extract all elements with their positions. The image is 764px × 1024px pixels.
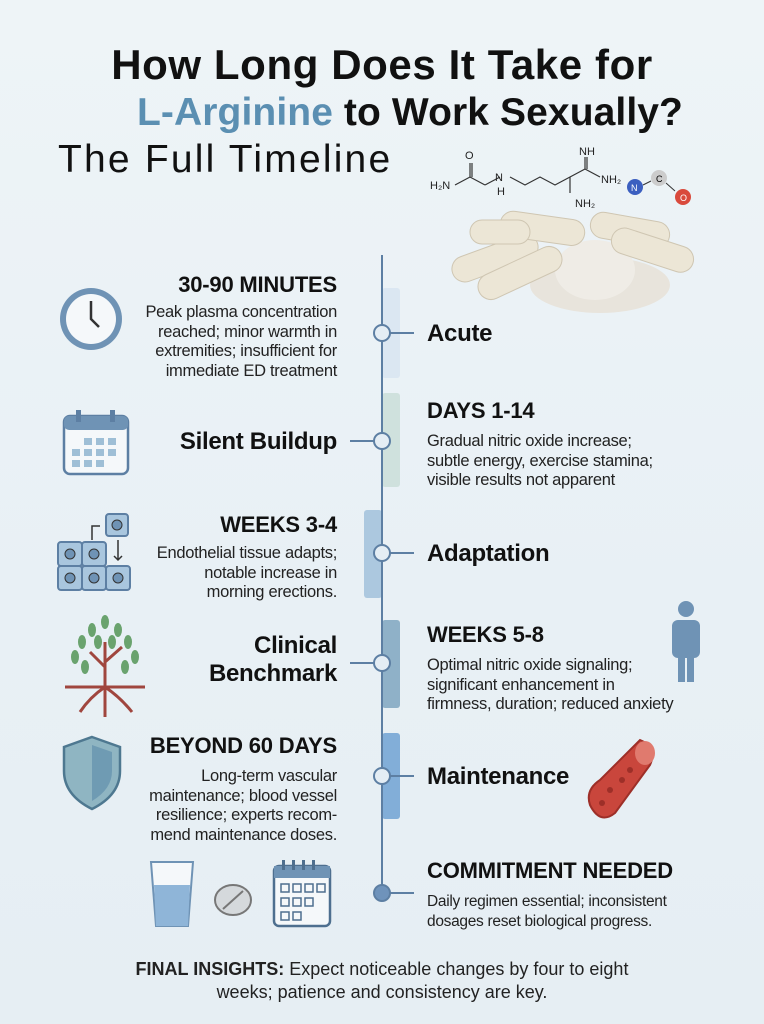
stage 5: beyond 60 days: resilience; experts recom- <box>156 806 337 824</box>
label: maintenance: Maintenance <box>427 763 569 790</box>
title: L-Arginine to Work Sexually? <box>137 91 683 134</box>
final insights: weeks; patience and consistency are key. <box>217 982 547 1002</box>
stage 3: weeks 3-4: notable increase in <box>204 564 337 582</box>
icon: pill <box>214 884 252 916</box>
molecule diagram: H <box>497 186 505 198</box>
stage 5: beyond 60 days <box>149 733 337 844</box>
stage 2: days 1-14: subtle energy, exercise stamina; <box>427 452 653 470</box>
stage 1: 30-90 minutes: extremities; insufficient for <box>155 342 337 360</box>
molecule diagram: NH <box>579 146 595 158</box>
icon: calendar <box>62 410 130 476</box>
icon: tree <box>65 615 145 717</box>
final insights <box>136 959 628 1002</box>
icon: cells <box>57 513 131 591</box>
molecule diagram: C <box>656 174 663 184</box>
stage 1: 30-90 minutes: immediate ED treatment <box>166 362 337 380</box>
stage 1: 30-90 minutes: 30-90 MINUTES <box>178 272 337 297</box>
subtitle: The Full Timeline <box>58 138 392 181</box>
stage 5: beyond 60 days: mend maintenance doses. <box>150 826 337 844</box>
molecule diagram: N <box>495 172 503 184</box>
title: How Long Does It Take for <box>111 41 653 88</box>
molecule diagram <box>430 146 691 210</box>
stage 4: weeks 5-8: firmness, duration; reduced anxiety <box>427 695 673 713</box>
stage 5: beyond 60 days: BEYOND 60 DAYS <box>150 733 337 758</box>
stage 3: weeks 3-4: Endothelial tissue adapts; <box>157 544 337 562</box>
label: clinical benchmark: Benchmark <box>209 660 337 687</box>
molecule diagram: H₂N <box>430 180 450 192</box>
stage 2: days 1-14: Gradual nitric oxide increase; <box>427 432 632 450</box>
molecule diagram: N <box>631 183 638 193</box>
molecule diagram: NH₂ <box>575 198 595 210</box>
stage 5: beyond 60 days: Long-term vascular <box>201 767 337 785</box>
label: clinical benchmark: Clinical <box>254 632 337 659</box>
stage 4: weeks 5-8 <box>427 622 674 713</box>
stage 4: weeks 5-8: significant enhancement in <box>427 676 615 694</box>
icon: blood vessel <box>588 738 655 818</box>
stage 1: 30-90 minutes <box>145 272 338 380</box>
stage 3: weeks 3-4: morning erections. <box>207 583 337 601</box>
stage 6: commitment needed: dosages reset biological progress. <box>427 912 652 930</box>
stage 3: weeks 3-4 <box>157 512 338 601</box>
label: silent buildup: Silent Buildup <box>180 428 337 455</box>
icon: clock <box>60 288 122 350</box>
stage 2: days 1-14: DAYS 1-14 <box>427 398 534 423</box>
stage 3: weeks 3-4: WEEKS 3-4 <box>220 512 337 537</box>
label: acute: Acute <box>427 320 492 347</box>
icon: water glass <box>150 861 194 927</box>
label: clinical benchmark <box>209 632 338 687</box>
stage 1: 30-90 minutes: reached; minor warmth in <box>158 322 337 340</box>
stage 6: commitment needed: Daily regimen essential; inconsistent <box>427 893 667 910</box>
stage 6: commitment needed <box>427 858 673 930</box>
icon: person <box>672 601 700 682</box>
molecule diagram: O <box>680 193 687 203</box>
label: adaptation: Adaptation <box>427 540 549 567</box>
stage 2: days 1-14: visible results not apparent <box>427 471 615 489</box>
icon: calendar check <box>272 860 332 928</box>
stage 4: weeks 5-8: Optimal nitric oxide signaling; <box>427 656 632 674</box>
stage 4: weeks 5-8: WEEKS 5-8 <box>427 622 544 647</box>
stage 6: commitment needed: COMMITMENT NEEDED <box>427 858 673 883</box>
stage 1: 30-90 minutes: Peak plasma concentration <box>145 303 337 321</box>
icon: shield <box>62 736 122 810</box>
capsules and powder image <box>451 210 694 313</box>
final insights: FINAL INSIGHTS: Expect noticeable changes by four to eight <box>136 959 628 979</box>
stage 2: days 1-14 <box>427 398 653 489</box>
molecule diagram: O <box>465 150 474 162</box>
title <box>111 41 683 134</box>
molecule diagram: NH₂ <box>601 174 621 186</box>
stage 5: beyond 60 days: maintenance; blood vessel <box>149 786 337 804</box>
